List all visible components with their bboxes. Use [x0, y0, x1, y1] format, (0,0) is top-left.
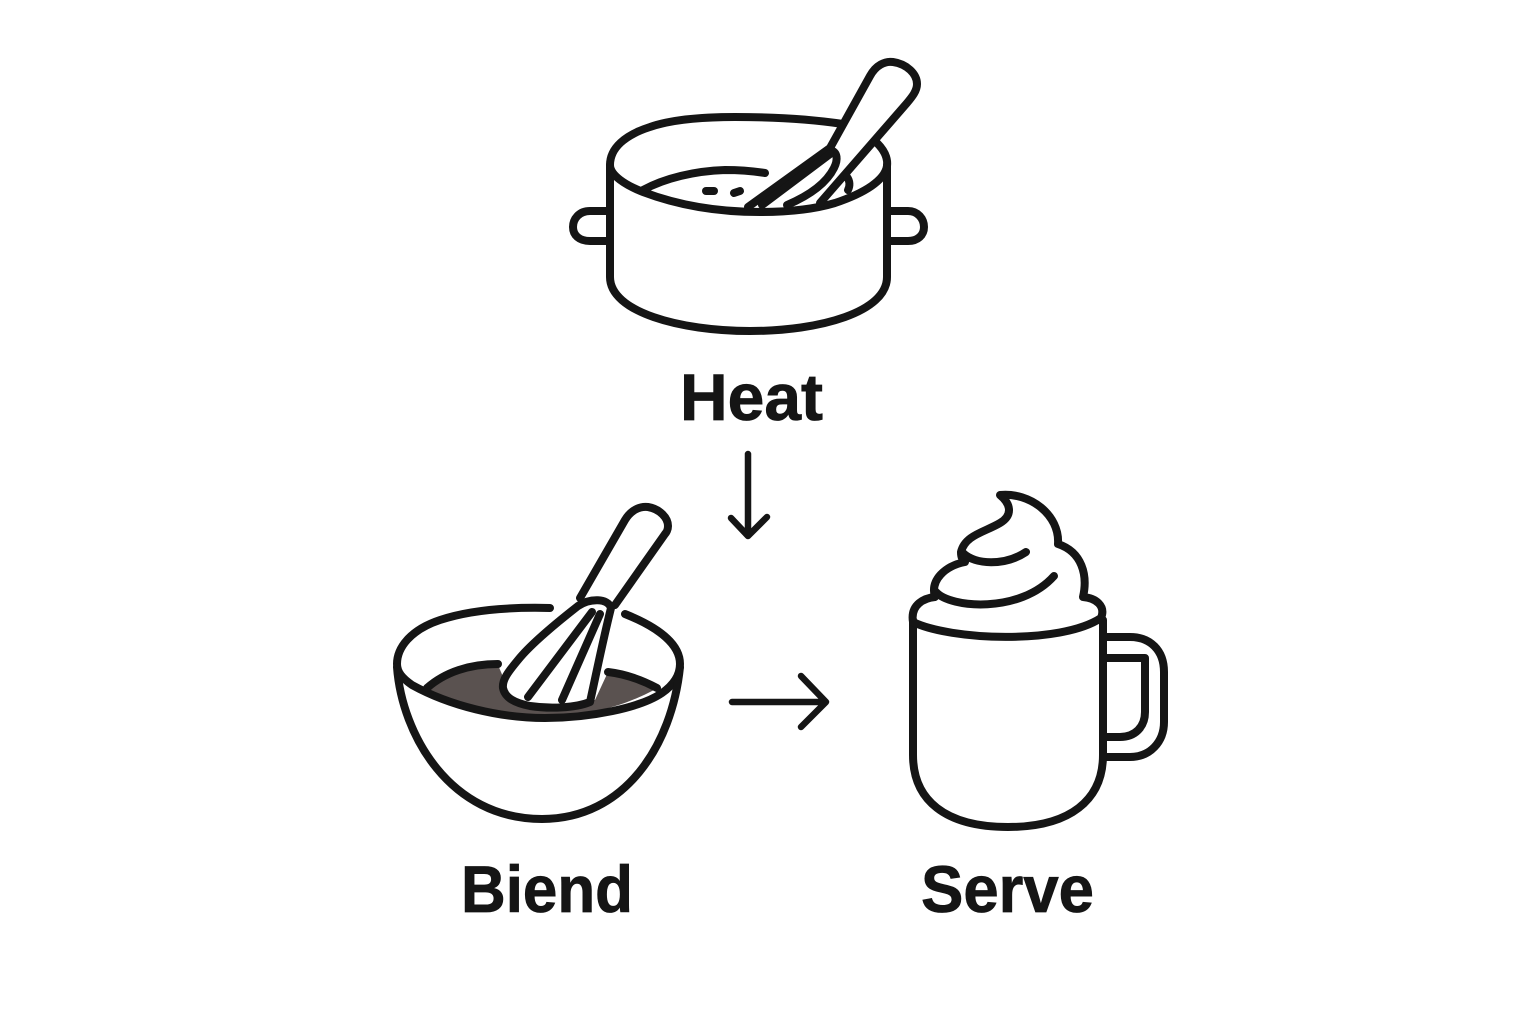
- heading: Heat: Heat: [680, 360, 823, 434]
- chocolate mixture: [430, 665, 654, 716]
- icon: mixing bowl with whisk: [397, 507, 680, 819]
- arrow: right to Serve: [732, 676, 826, 727]
- icon: mug with whipped cream: [913, 495, 1164, 827]
- arrow: down from Heat: [731, 454, 767, 536]
- heading: Serve: Serve: [921, 852, 1094, 926]
- icon: cooking pot with spoon: [573, 62, 924, 331]
- heading: Blend: Biend: [461, 852, 633, 926]
